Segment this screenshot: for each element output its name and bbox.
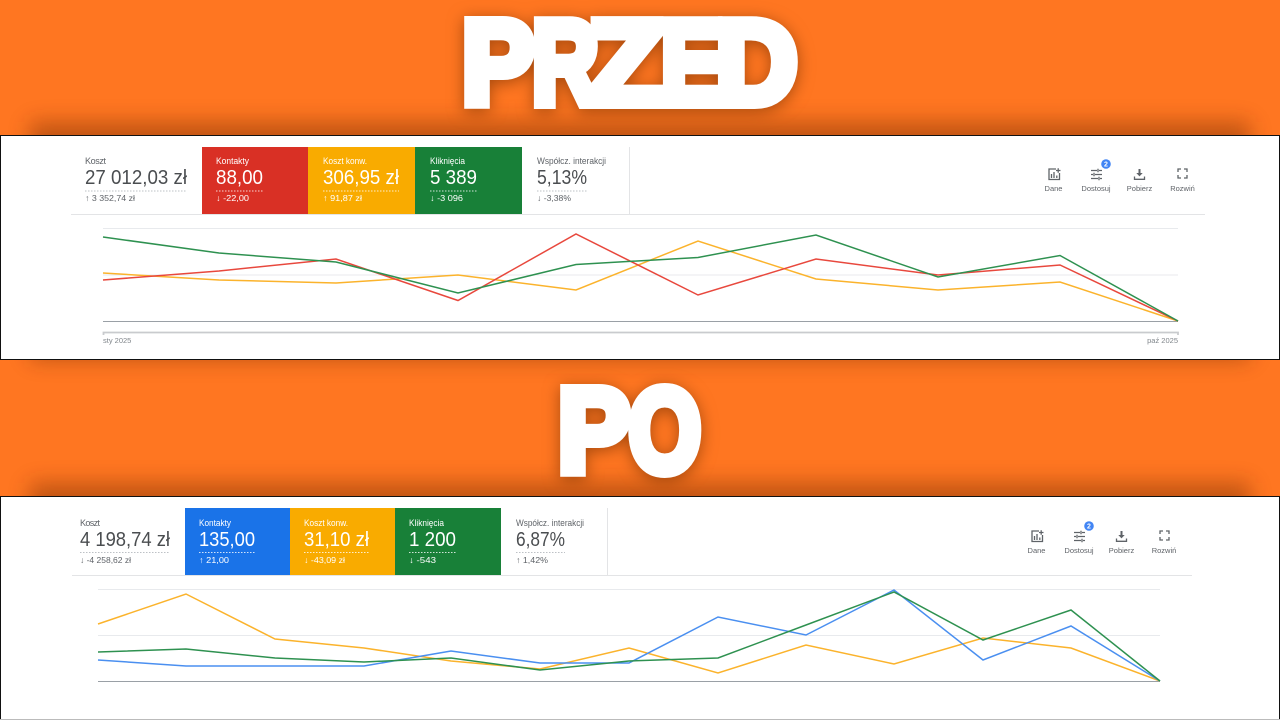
toolbar: Dane — [1028, 530, 1045, 555]
metric: Koszt: 27 012,03 zł — [85, 167, 188, 189]
metric: Koszt: 4 198,74 zł — [80, 529, 171, 551]
heading: PRZED: Z — [588, 0, 664, 130]
heading: PRZED: P — [462, 0, 534, 130]
metric card: Kontakty — [185, 508, 290, 575]
metric card: Koszt konw.: Koszt konw. — [323, 156, 367, 166]
toolbar: Dostosuj: Dostosuj — [1064, 546, 1094, 555]
metric: Współcz. interakcji: Współcz. interakcji — [516, 518, 584, 528]
toolbar: Pobierz: Pobierz — [1109, 546, 1134, 555]
metric card: Kontakty: 135,00 — [199, 529, 255, 551]
heading: PO — [558, 364, 701, 498]
series: Kliknięcia — [103, 235, 1178, 321]
line chart: after — [98, 590, 1160, 682]
toolbar: Dane: Dane — [1045, 184, 1062, 193]
toolbar: Rozwiń — [1170, 169, 1195, 193]
toolbar: Dostosuj: 2 — [1104, 162, 1108, 169]
metric card: Koszt konw. — [308, 147, 415, 214]
metric: Koszt: ↓ -4 258,62 zł — [80, 555, 131, 565]
heading: PRZED: D — [716, 0, 797, 130]
metric card: Kliknięcia — [395, 508, 501, 575]
heading: PO: O — [629, 364, 701, 498]
toolbar: Rozwiń: Rozwiń — [1152, 546, 1176, 555]
axis label: start: sty 2025 — [103, 336, 131, 345]
toolbar: Dane: Dane — [1028, 546, 1045, 555]
metric: Współcz. interakcji: ↓ -3,38% — [537, 193, 571, 203]
series: Kliknięcia — [98, 592, 1160, 681]
metric card: Kliknięcia: 1 200 — [409, 529, 456, 551]
metric card: Kontakty: ↓ -22,00 — [216, 193, 249, 203]
metric: Współcz. interakcji: Współcz. interakcji — [537, 156, 606, 166]
series: Kontakty — [98, 590, 1160, 681]
metric card: Koszt konw. — [290, 508, 395, 575]
metric card: Kliknięcia: ↓ -3 096 — [430, 193, 463, 203]
toolbar: Dostosuj: 2 — [1087, 524, 1091, 531]
series: Koszt konw. — [103, 241, 1178, 321]
metric: Koszt — [85, 156, 188, 203]
heading: PO: P — [558, 364, 630, 498]
metric: Koszt — [80, 518, 171, 565]
metric card: Kliknięcia: Kliknięcia — [430, 156, 465, 166]
metric: Współcz. interakcji — [537, 156, 606, 203]
panel: before campaign dashboard — [0, 136, 1280, 360]
series: Koszt konw. — [98, 594, 1160, 681]
toolbar: Pobierz — [1127, 169, 1152, 193]
toolbar: Dostosuj — [1064, 521, 1094, 555]
metric card: Kontakty: Kontakty — [199, 518, 231, 528]
toolbar: Pobierz — [1109, 531, 1134, 555]
axis label: end: paź 2025 — [1147, 336, 1178, 345]
toolbar: Rozwiń: Rozwiń — [1170, 184, 1195, 193]
metric card: Kontakty: ↑ 21,00 — [199, 555, 229, 565]
metric card: Kontakty — [202, 147, 308, 214]
series: Kontakty — [103, 234, 1178, 321]
metric card: Kontakty: 88,00 — [216, 167, 263, 189]
metric card: Kontakty: Kontakty — [216, 156, 249, 166]
metric card: Koszt konw.: Koszt konw. — [304, 518, 348, 528]
panel shadows — [30, 122, 1250, 720]
metric: Koszt: ↑ 3 352,74 zł — [85, 193, 135, 203]
metric card: Koszt konw.: 306,95 zł — [323, 167, 400, 189]
metric card: Kliknięcia: Kliknięcia — [409, 518, 444, 528]
metric: Współcz. interakcji: 6,87% — [516, 529, 565, 551]
metric: Współcz. interakcji: 5,13% — [537, 167, 587, 189]
metric: Współcz. interakcji — [516, 518, 584, 565]
toolbar: Dostosuj: Dostosuj — [1081, 184, 1111, 193]
metric: Koszt: Koszt — [85, 156, 106, 166]
line chart: before — [103, 228, 1178, 345]
toolbar: Dane — [1045, 168, 1062, 193]
metric: Współcz. interakcji: ↑ 1,42% — [516, 555, 548, 565]
panel: after campaign dashboard — [0, 496, 1280, 720]
metric card: Koszt konw.: ↑ 91,87 zł — [323, 193, 362, 203]
toolbar: Dostosuj — [1081, 159, 1111, 193]
metric card: Kliknięcia — [415, 147, 522, 214]
heading: PRZED — [462, 0, 797, 130]
metric card: Koszt konw.: ↓ -43,09 zł — [304, 555, 345, 565]
toolbar: Pobierz: Pobierz — [1127, 184, 1152, 193]
metric card: Kliknięcia: ↓ -543 — [409, 555, 436, 565]
heading: PRZED: R — [532, 0, 599, 130]
heading: PRZED: E — [661, 0, 724, 130]
metric card: Koszt konw.: 31,10 zł — [304, 529, 370, 551]
metric: Koszt: Koszt — [80, 518, 100, 528]
toolbar: Rozwiń — [1152, 531, 1176, 555]
metric card: Kliknięcia: 5 389 — [430, 167, 477, 189]
